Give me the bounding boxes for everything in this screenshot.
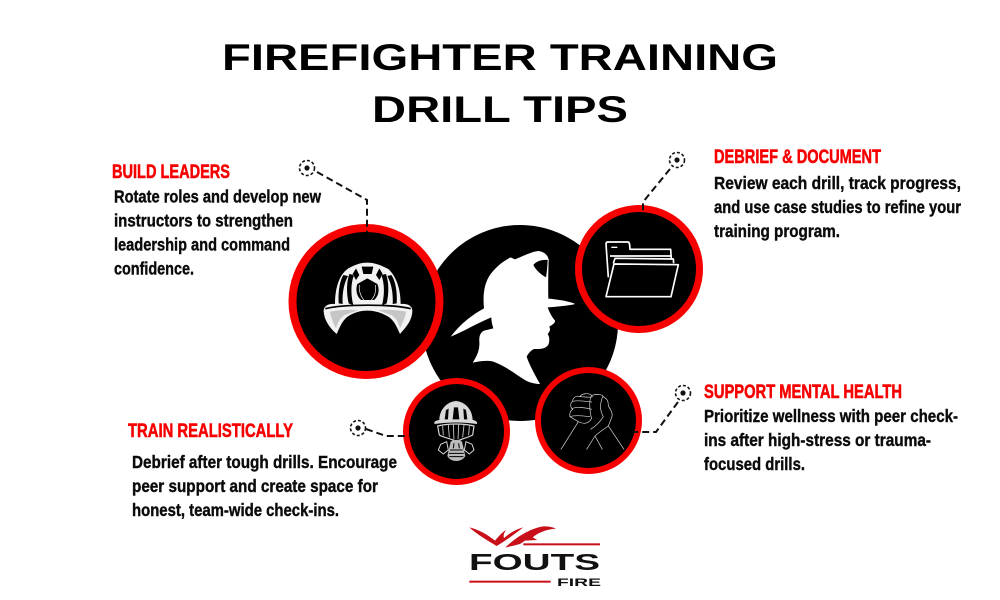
text block: debrief and document: training program. [714, 221, 840, 241]
text block: build leaders: BUILD LEADERS [112, 161, 230, 183]
icon: clasped hands [561, 394, 624, 449]
logo: Fouts Fire [469, 526, 601, 589]
panel: build leaders icon circle [292, 228, 440, 375]
text block: support mental health: ins after high-stress or trauma- [704, 430, 931, 450]
text block: support mental health: focused drills. [704, 454, 805, 474]
icon: gas mask helmet [434, 401, 477, 461]
logo: Fouts Fire: FOUTS [469, 549, 600, 575]
text block: train realistically: Debrief after tough drills. Encourage [132, 452, 397, 472]
text block: train realistically: TRAIN REALISTICALLY [128, 420, 293, 442]
title [222, 37, 778, 130]
logo: Fouts Fire: FIRE [557, 577, 601, 589]
text block: train realistically: peer support and create space for [132, 476, 378, 496]
title: FIREFIGHTER TRAINING [222, 37, 778, 78]
connector: debrief and document [643, 152, 684, 212]
text block: debrief and document: and use case studies to refine your [714, 197, 961, 217]
text block: support mental health [704, 381, 958, 474]
panel: train realistically icon circle [406, 381, 507, 482]
text block: debrief and document [714, 146, 961, 241]
text block: debrief and document: DEBRIEF & DOCUMENT [714, 146, 881, 168]
text block: support mental health: SUPPORT MENTAL HEALTH [704, 381, 902, 403]
text block: build leaders: instructors to strengthen [114, 210, 293, 230]
panel: support mental health icon circle [538, 370, 639, 471]
connector: build leaders [300, 160, 367, 232]
text block: debrief and document: Review each drill, track progress, [714, 173, 961, 193]
panel: debrief icon circle [578, 208, 700, 330]
connector: support mental health [634, 386, 690, 432]
text block: build leaders: Rotate roles and develop new [114, 186, 321, 206]
central circle with firefighter silhouette [422, 225, 618, 421]
connector: train realistically [350, 420, 410, 436]
text block: build leaders [112, 161, 321, 278]
text block: train realistically [128, 420, 397, 520]
title: DRILL TIPS [372, 89, 628, 130]
text block: train realistically: honest, team-wide check-ins. [132, 500, 339, 520]
text block: support mental health: Prioritize wellness with peer check- [704, 406, 958, 426]
text block: build leaders: leadership and command [114, 234, 290, 254]
icon: fire helmet [324, 263, 412, 334]
text block: build leaders: confidence. [114, 258, 194, 278]
icon: folder [606, 242, 678, 297]
